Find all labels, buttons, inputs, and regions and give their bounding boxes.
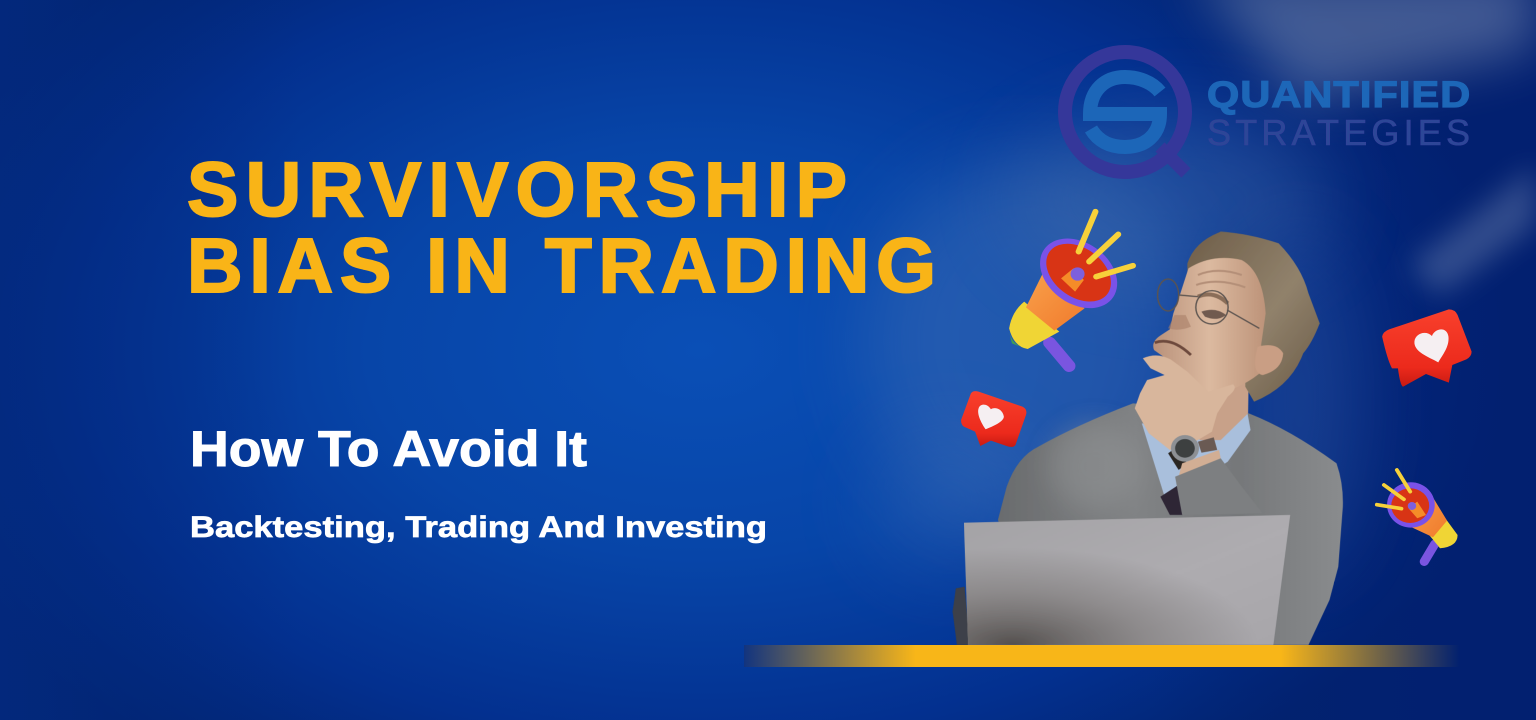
mouth line — [1155, 341, 1191, 355]
neck — [1186, 370, 1249, 440]
nose shadow — [1168, 315, 1191, 330]
subtitle: How To Avoid It — [190, 421, 587, 477]
logo word: Quantified: QUANTIFIED — [1207, 74, 1470, 115]
logo word: Strategies: STRATEGIES — [1207, 112, 1470, 153]
hand on chin — [1135, 355, 1235, 450]
eyebrow — [1198, 294, 1228, 303]
face — [1153, 258, 1266, 397]
megaphone handle — [1049, 343, 1069, 366]
title line 1: SURVIVORSHIP — [187, 147, 847, 233]
title — [187, 147, 936, 309]
shirt collar — [1142, 411, 1251, 497]
left arm sleeve — [953, 587, 970, 645]
icon: small megaphone — [1377, 470, 1458, 562]
megaphone centre — [1061, 268, 1084, 292]
megaphone rays — [1079, 212, 1133, 277]
megaphone base — [1009, 302, 1059, 349]
wrist — [1179, 450, 1221, 477]
man thinking behind laptop — [953, 232, 1343, 645]
forehead wrinkles — [1196, 271, 1245, 287]
laptop — [964, 515, 1290, 645]
icon: large megaphone — [1009, 212, 1133, 366]
tie — [1160, 483, 1183, 515]
logo emblem — [1065, 52, 1186, 173]
icon: large heart bubble — [1382, 309, 1472, 387]
ear — [1255, 345, 1283, 375]
tagline: Backtesting, Trading And Investing — [190, 511, 767, 544]
sweater sleeve — [1175, 458, 1263, 515]
watch — [1168, 435, 1217, 470]
megaphone cone — [1026, 274, 1085, 331]
icon: small heart bubble — [961, 391, 1026, 447]
hair — [1187, 232, 1320, 402]
background smoke and light rays — [865, 0, 1536, 570]
title line 2: BIAS IN TRADING — [187, 223, 936, 309]
eye — [1201, 310, 1226, 319]
glasses — [1158, 279, 1259, 328]
megaphone rim — [1026, 224, 1132, 322]
logo: Quantified Strategies watermark — [1065, 52, 1470, 173]
sweater highlight — [1049, 423, 1140, 510]
megaphone mouth — [1034, 232, 1123, 313]
sweater — [998, 403, 1343, 645]
gold bar — [744, 645, 1460, 667]
